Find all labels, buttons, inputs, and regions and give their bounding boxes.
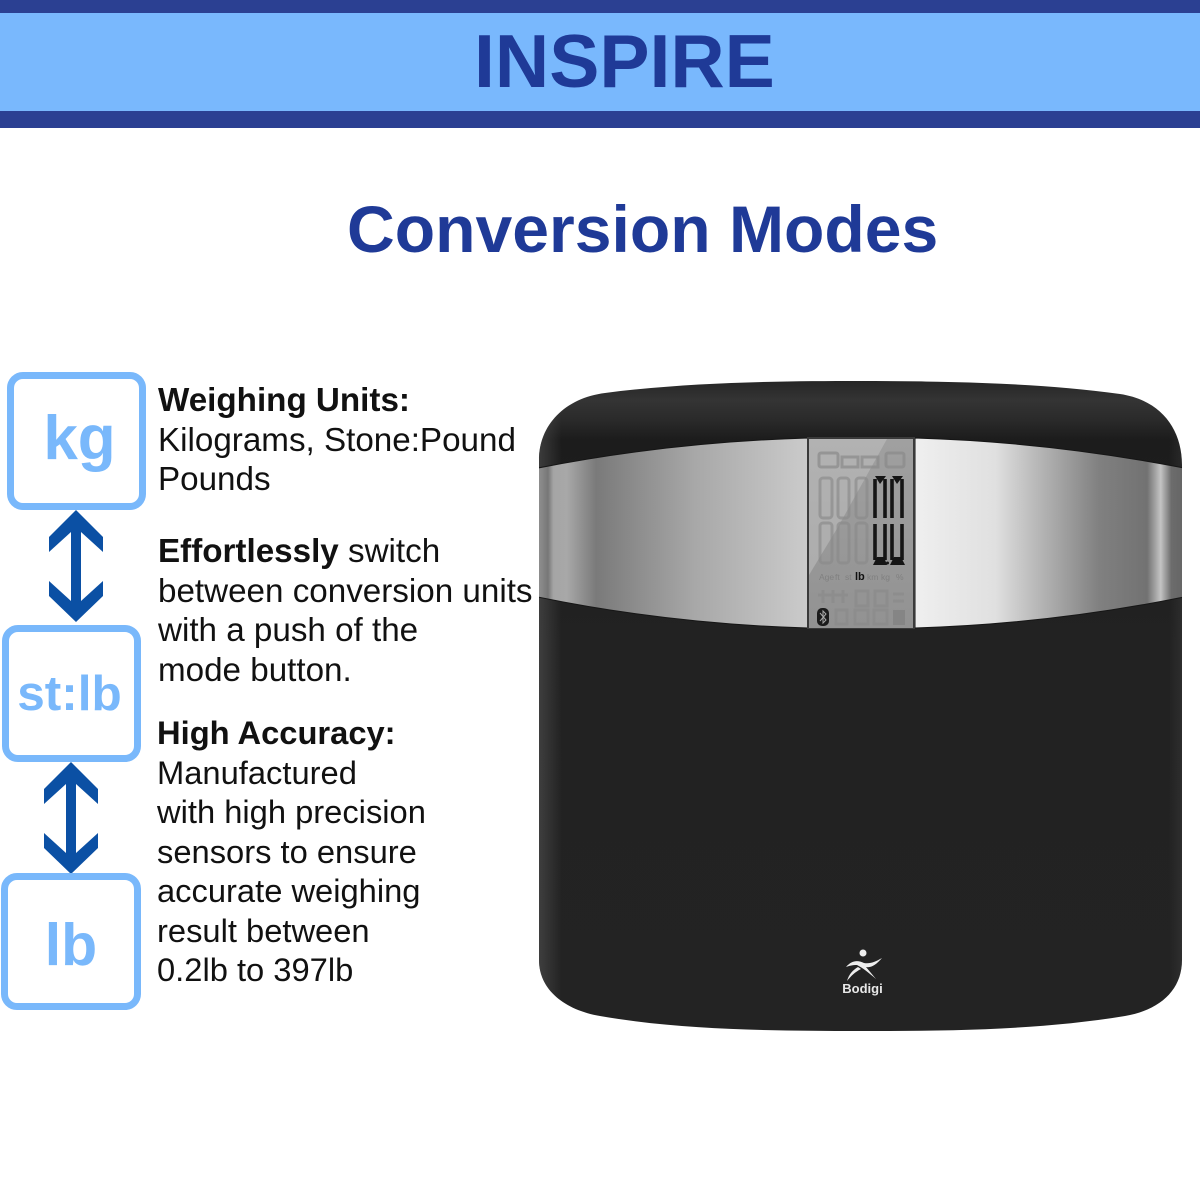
LCD unit labels: Age (819, 572, 834, 582)
heading: Conversion Modes (347, 193, 938, 267)
text block: high accuracy: sensors to ensure (157, 832, 417, 870)
scale body (539, 381, 1182, 1031)
text block: weighing units (158, 382, 516, 498)
text block: effortlessly switch: mode button. (158, 652, 352, 688)
title: INSPIRE (474, 19, 775, 103)
text block: high accuracy: result between (157, 912, 370, 948)
LCD unit labels (819, 572, 904, 582)
LCD unit labels: % (896, 572, 904, 582)
product: bathroom scale (539, 381, 1182, 1031)
text block: effortlessly switch: with a push of the (158, 612, 418, 649)
text block: high accuracy: 0.2lb to 397lb (157, 951, 353, 988)
unit box: st:lb (2, 625, 141, 762)
LCD active digits (875, 479, 902, 560)
LCD faint top icons (819, 453, 904, 467)
text block: high accuracy: accurate weighing (157, 872, 420, 909)
LCD unit labels: km (867, 572, 878, 582)
text block: high accuracy: with high precision (157, 793, 426, 830)
Bodigi logo (842, 950, 883, 996)
LCD display (807, 437, 915, 629)
header banner (0, 0, 1200, 128)
unit box: lb: lb (45, 912, 97, 978)
LCD unit labels: st (845, 572, 852, 582)
arrow: kg to st:lb (49, 510, 103, 622)
text block: effortlessly switch (158, 533, 533, 688)
text block: weighing units: Weighing Units: (158, 382, 410, 419)
LCD battery (893, 610, 905, 625)
LCD display: lb (855, 571, 865, 583)
text block: high accuracy: High Accuracy: (157, 714, 396, 751)
text block: weighing units: Kilograms, Stone:Pound (158, 422, 516, 458)
unit box: kg: kg (43, 404, 116, 473)
text block: effortlessly switch: between conversion units (158, 572, 533, 610)
text block: effortlessly switch: Effortlessly switch (158, 533, 440, 570)
arrow: st:lb to lb (44, 762, 98, 873)
unit box: lb (1, 873, 141, 1010)
LCD bluetooth icon (817, 608, 829, 626)
LCD unit labels: kg (881, 572, 890, 582)
Bodigi logo: Bodigi (842, 981, 883, 996)
unit box: st:lb: st:lb (17, 666, 122, 721)
steel band (538, 438, 1184, 628)
text block: high accuracy (157, 714, 426, 988)
unit box: kg (7, 372, 146, 510)
LCD unit labels: ft (835, 572, 840, 582)
text block: high accuracy: Manufactured (157, 754, 357, 790)
text block: weighing units: Pounds (158, 461, 271, 498)
header bottom stripe (0, 111, 1200, 128)
LCD faint digits (818, 478, 904, 624)
header top stripe (0, 0, 1200, 13)
